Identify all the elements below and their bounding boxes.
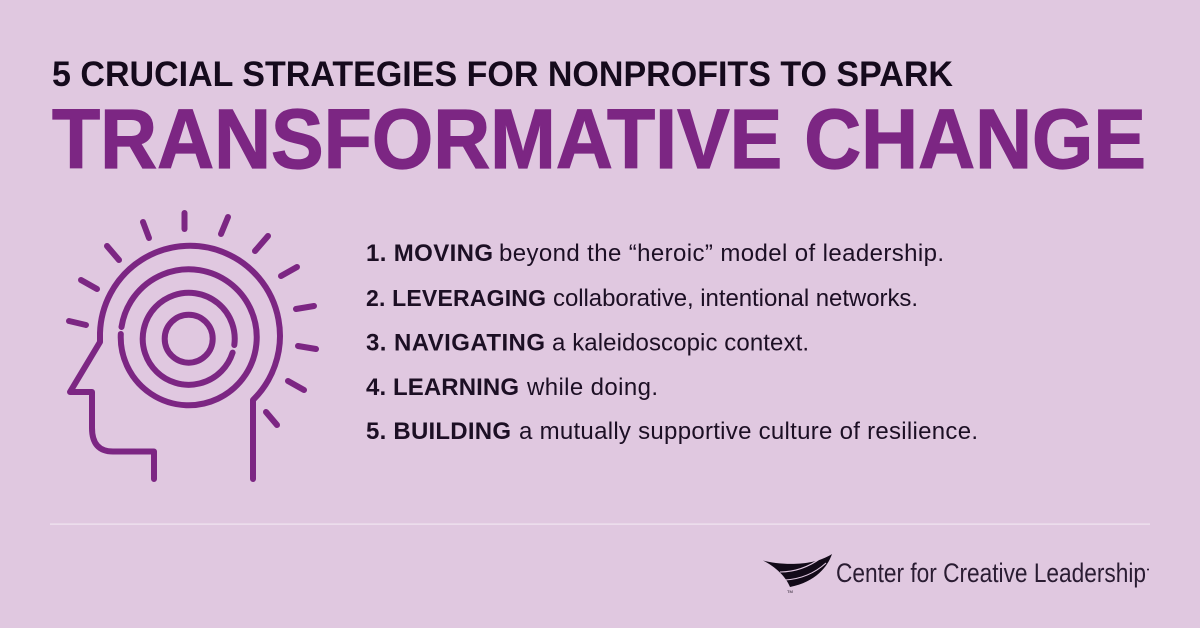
logo wordmark: Center for Creative Leadership: [836, 558, 1146, 588]
item 5: a mutually supportive culture of resilience.: [519, 418, 978, 445]
icon: head with concentric circles and rays: [69, 213, 316, 479]
item 4: while doing.: [526, 374, 658, 401]
item 2: 2. LEVERAGING: [366, 285, 546, 311]
item 3: [366, 330, 809, 356]
item 4: [366, 374, 658, 401]
logo mark: [763, 554, 832, 594]
logo mark: TM: [787, 589, 793, 594]
item 3: a kaleidoscopic context.: [552, 330, 809, 356]
item 1: beyond the “heroic” model of leadership.: [499, 240, 944, 267]
item 5: 5. BUILDING: [366, 418, 511, 445]
item 1: 1. MOVING: [366, 240, 493, 267]
inner ring: [165, 315, 213, 363]
rays: [69, 213, 316, 425]
item 2: collaborative, intentional networks.: [553, 285, 918, 312]
head outline: [70, 246, 280, 479]
item 3: 3. NAVIGATING: [366, 330, 545, 356]
third ring: [121, 269, 257, 405]
title: kicker line: 5 CRUCIAL STRATEGIES FOR NONPROFITS TO SPARK: [52, 55, 953, 94]
second ring: [143, 293, 235, 385]
item 2: [366, 285, 918, 312]
logo: Center for Creative Leadership: [763, 554, 1149, 594]
strategy list: [366, 240, 978, 445]
item 4: 4. LEARNING: [366, 374, 519, 401]
title: main heading: TRANSFORMATIVE CHANGE: [52, 92, 1146, 186]
